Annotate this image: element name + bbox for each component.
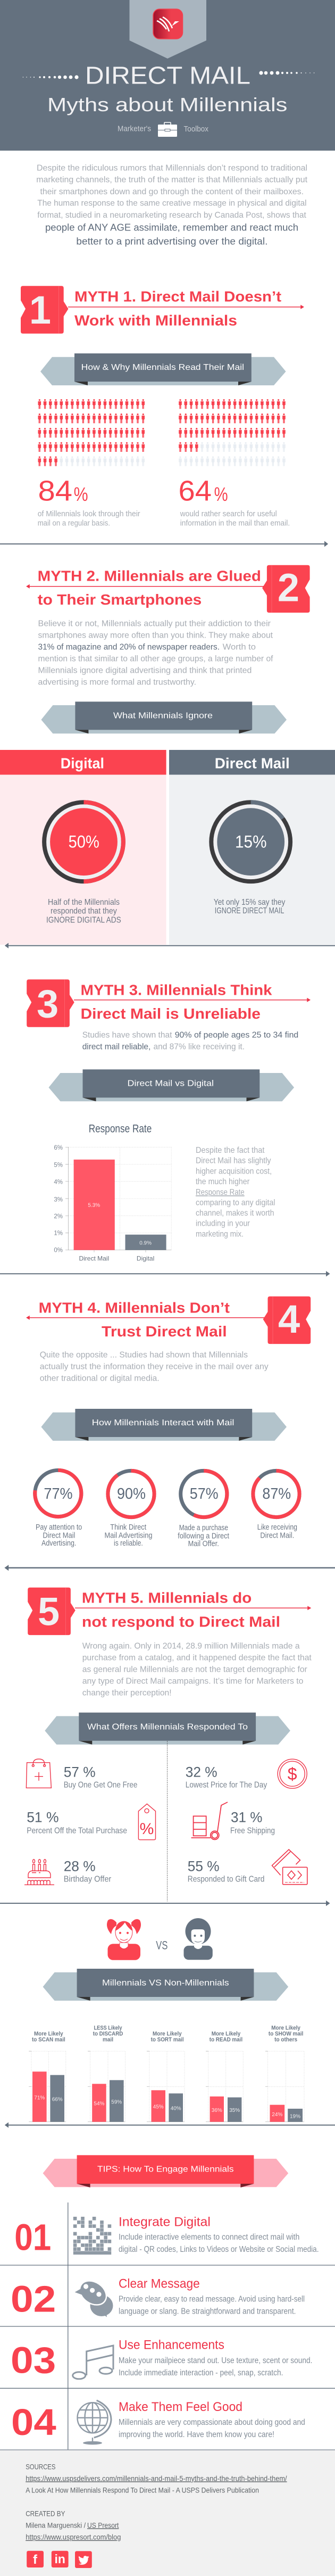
icon: facebook: [27, 2551, 44, 2567]
icon: music notes: [73, 2346, 113, 2379]
chart title: [269, 2025, 303, 2043]
icon: globe: [78, 2400, 111, 2445]
chart title: [93, 2025, 123, 2043]
ribbon: tips: [43, 2155, 288, 2187]
myth 1 heading: [21, 286, 303, 334]
panel: direct mail: [169, 750, 335, 945]
ribbon: what offers: [45, 1713, 290, 1745]
icon: shopping bag: [26, 1759, 51, 1788]
bar: direct mail: [74, 1160, 115, 1250]
ribbon: what millennials ignore: What Millennials Ignore: [113, 711, 213, 720]
intro text: format, studied in a neuromarketing research by Canada Post, shows that: [37, 211, 306, 220]
chart title: More Likely: [212, 2031, 241, 2037]
digital caption: Half of the Millennials: [48, 898, 120, 907]
tip 1: integrate digital: [14, 2215, 319, 2258]
direct mail caption: Yet only 15% say they: [214, 898, 285, 907]
myth 2 body: mention is that similar to all other age groups, a large number of: [38, 655, 273, 664]
offer: lowest price: 32 %: [186, 1764, 217, 1780]
intro text: better to a print advertising over the digital.: [76, 236, 267, 246]
chart title: to READ mail: [210, 2037, 242, 2043]
ribbon: what millennials ignore: [41, 701, 287, 733]
ribbon: how millennials interact: How Millennials Interact with Mail: [92, 1418, 234, 1427]
stat: 64 percent: [179, 475, 290, 527]
bars: [210, 2096, 224, 2122]
offer: buy one get one free: Buy One Get One Free: [64, 1781, 137, 1790]
chart: read mail: 35%: [229, 2108, 240, 2113]
sources: SOURCES: [26, 2462, 55, 2471]
myth 2 body: [38, 620, 273, 687]
direct mail caption: [214, 898, 285, 915]
donut: 50 percent: [44, 802, 123, 881]
chart: scan mail: 71%: [34, 2095, 45, 2101]
chart title: to SORT mail: [151, 2037, 184, 2043]
icon: cake: [24, 1860, 54, 1885]
bar value labels: 0.9%: [139, 1241, 152, 1246]
pictogram: 64 percent: [179, 399, 286, 466]
caption: Mail Offer.: [188, 1539, 219, 1548]
bars: [270, 2105, 284, 2122]
myth 2 heading: [27, 565, 310, 613]
icon: gift cards: [272, 1850, 307, 1885]
y axis labels: 6%: [54, 1145, 63, 1151]
chart title: LESS Likely: [94, 2025, 122, 2032]
stat: 84 percent: 84: [38, 475, 72, 507]
stat: 64 percent: 64: [179, 475, 212, 507]
chart commentary: channel, makes it worth: [196, 1209, 274, 1218]
toolbox label: Toolbox: [184, 125, 208, 134]
myth 5 body: purchase from a catalog, and it happened despite the fact that: [82, 1653, 312, 1662]
offer: birthday: Birthday Offer: [64, 1875, 112, 1884]
myth 2 body: Believe it or not, Millennials actually put their addiction to their: [38, 620, 271, 629]
badge 3: 3: [37, 982, 58, 1026]
vs label: VS: [156, 1939, 168, 1952]
myth 1 title line 2: Work with Millennials: [74, 312, 237, 328]
bars: [151, 2090, 165, 2122]
x axis labels: Direct Mail: [79, 1255, 109, 1262]
decorative dots right: [259, 71, 314, 75]
stat: 84 percent: of Millennials look through their: [38, 509, 140, 518]
myth 2 title line 1: MYTH 2. Millennials are Glued: [38, 568, 261, 584]
logo: [153, 9, 183, 39]
caption: Made a purchase: [179, 1523, 228, 1532]
caption: Advertising.: [41, 1539, 76, 1548]
tip 3: use enhancements: 03: [11, 2339, 56, 2381]
tip 4: make them feel good: Millennials are very compassionate about doing good and: [119, 2418, 305, 2427]
chart commentary: Response Rate: [196, 1188, 245, 1197]
donut: 15 percent: [211, 802, 290, 881]
tip 2: clear message: Provide clear, easy to read message. Avoid using hard-sell: [119, 2294, 305, 2303]
donut: 77 percent: 77%: [44, 1485, 73, 1502]
caption: Direct Mail: [43, 1531, 75, 1540]
myth 4 heading: [27, 1297, 311, 1344]
sources: A Look At How Millennials Respond To Direct Mail - A USPS Delivers Publication: [26, 2486, 259, 2494]
bar value labels: 5.3%: [88, 1203, 100, 1209]
donut: 87 percent: [253, 1471, 299, 1540]
arrow: [75, 1607, 311, 1609]
x axis labels: [79, 1255, 154, 1262]
chart commentary: comparing to any digital: [196, 1198, 275, 1207]
myth 2 body: 31% of magazine and 20% of newspaper readers.: [38, 643, 220, 652]
tip 2: clear message: 02: [11, 2278, 56, 2319]
digital caption: IGNORE DIGITAL ADS: [46, 915, 121, 924]
caption: Like receiving: [257, 1523, 297, 1532]
myth 2 body: Worth to: [223, 643, 256, 652]
badge 1: 1: [29, 288, 51, 332]
arrow: section divider: [5, 2124, 335, 2127]
icon: dollar coin: [278, 1759, 307, 1788]
chart title: to others: [274, 2037, 297, 2043]
ribbon: millennials vs non-millennials: [43, 1969, 288, 2001]
chart commentary: the much higher: [196, 1177, 250, 1186]
stat: 84 percent: mail on a regular basis.: [38, 518, 110, 527]
ribbon: direct mail vs digital: [49, 1069, 294, 1101]
badge 2: 2: [278, 565, 299, 609]
bar: digital: [125, 1235, 166, 1250]
credits: [26, 2509, 121, 2541]
illustration: millennial girl: [107, 1919, 141, 1960]
marketer's label: Marketer's: [118, 125, 151, 134]
donut: 50 percent: 50%: [69, 832, 99, 852]
intro text: The human response to the same creative message in physical and digital: [37, 199, 307, 208]
myth 5 body: as general rule Millennials are not the target demographic for: [82, 1665, 307, 1674]
chart commentary: Direct Mail has slightly: [196, 1157, 271, 1166]
chart: show mail: [265, 2025, 304, 2122]
offer: free shipping: 31 %: [231, 1809, 262, 1825]
myth 4 body: actually trust the information they receive in the mail over any: [40, 1363, 269, 1372]
myth 5 title line 1: MYTH 5. Millennials do: [82, 1590, 252, 1606]
tip 4: make them feel good: 04: [11, 2401, 56, 2443]
caption: Think Direct: [110, 1523, 147, 1532]
offer: birthday: 28 %: [64, 1859, 96, 1875]
caption: [36, 1523, 82, 1548]
x axis labels: Digital: [137, 1255, 154, 1262]
badge 2: [262, 565, 310, 613]
caption: [178, 1523, 230, 1548]
offer: gift card: Responded to Gift Card: [188, 1875, 264, 1884]
tip 3: use enhancements: Make your mailpiece stand out. Use texture, scent or sound.: [119, 2356, 312, 2365]
myth 4 title line 2: Trust Direct Mail: [102, 1323, 227, 1340]
chart: sort mail: 40%: [171, 2106, 181, 2112]
stat: 64 percent: would rather search for useful: [180, 509, 277, 518]
donut: 15 percent: 15%: [235, 832, 267, 852]
myth 3 body: direct mail reliable,: [82, 1042, 150, 1051]
icon: qr code: [73, 2217, 111, 2255]
credits: https://www.uspresort.com/blog: [26, 2533, 121, 2541]
intro text: people of ANY AGE assimilate, remember and react much: [45, 222, 298, 233]
chart: scan mail: [29, 2031, 66, 2122]
arrow: [68, 306, 303, 308]
intro text: their smartphones down and go through the content of their mailboxes.: [40, 187, 304, 196]
myth 4 body: [40, 1351, 269, 1383]
chart title: [151, 2031, 184, 2043]
myth 2 body: smartphones away more often than you think. They make about: [38, 631, 273, 640]
offer: birthday: [24, 1859, 112, 1885]
icon: twitter: [75, 2551, 92, 2568]
decorative dots left: [23, 75, 79, 79]
badge 4: 4: [278, 1297, 300, 1341]
caption: Direct Mail.: [260, 1531, 294, 1540]
tip 4: make them feel good: Make Them Feel Good: [119, 2400, 242, 2414]
myth 3 body: 90% of people ages 25 to 34 find: [175, 1030, 298, 1039]
bar chart: response rate: [54, 1123, 171, 1262]
icon: linkedin: [52, 2551, 69, 2567]
direct mail caption: IGNORE DIRECT MAIL: [215, 906, 284, 915]
chart title: More Likely: [34, 2031, 63, 2037]
tip 3: use enhancements: Use Enhancements: [119, 2338, 224, 2352]
offer: percent off: 51 %: [27, 1809, 58, 1825]
digital caption: responded that they: [51, 907, 117, 916]
icon: price tag: %: [140, 1820, 154, 1838]
myth 3 title line 2: Direct Mail is Unreliable: [81, 1005, 261, 1022]
icon: price tag: [138, 1804, 155, 1840]
ribbon: how millennials interact: [41, 1409, 287, 1441]
digital caption: [46, 898, 121, 924]
y axis labels: 5%: [54, 1162, 63, 1168]
chart title: More Likely: [271, 2025, 301, 2032]
header banner: [0, 0, 335, 151]
chart: show mail: 19%: [290, 2113, 300, 2119]
bars: [92, 2084, 106, 2122]
tip 2: clear message: [11, 2276, 305, 2319]
y axis labels: 2%: [54, 1213, 63, 1220]
myth 1 title line 1: MYTH 1. Direct Mail Doesn’t: [74, 288, 281, 305]
offer: lowest price: [186, 1759, 307, 1790]
myth 5 title line 2: not respond to Direct Mail: [82, 1613, 280, 1630]
y axis labels: 0%: [54, 1248, 63, 1254]
myth 3 title line 1: MYTH 3. Millennials Think: [81, 981, 272, 998]
myth 5 heading: [28, 1588, 311, 1635]
ribbon: how and why: [40, 353, 286, 385]
ribbon: tips: TIPS: How To Engage Millennials: [97, 2165, 234, 2174]
chart title: to SCAN mail: [32, 2037, 65, 2043]
stat: 84 percent: [38, 475, 140, 527]
chart title: [210, 2031, 242, 2043]
tip 2: clear message: language or slang. Be straightforward and transparent.: [119, 2307, 296, 2316]
title: direct mail: DIRECT MAIL: [85, 62, 250, 89]
icon: hand truck: [191, 1802, 228, 1839]
donut: 77 percent: [35, 1470, 82, 1548]
y axis labels: [54, 1145, 63, 1254]
credits: Milena Marguenski /: [26, 2521, 86, 2529]
chart commentary: marketing mix.: [196, 1230, 244, 1239]
icon: facebook: f: [33, 2553, 38, 2567]
offer: gift card: [188, 1850, 307, 1885]
offer: free shipping: [191, 1802, 275, 1839]
arrow: [74, 998, 310, 1001]
myth 4 title line 1: MYTH 4. Millennials Don’t: [39, 1300, 230, 1316]
icon: dollar coin: $: [288, 1764, 297, 1784]
intro text: [36, 164, 308, 246]
stat: 84 percent: %: [74, 483, 88, 505]
chart commentary: Despite the fact that: [196, 1146, 265, 1155]
tip 3: use enhancements: Include immediate interaction - peel, snap, scratch.: [119, 2368, 283, 2377]
donut: 57 percent: [178, 1471, 230, 1548]
chart: scan mail: 66%: [52, 2096, 63, 2102]
offer: gift card: 55 %: [188, 1859, 220, 1875]
badge 3: [27, 979, 74, 1027]
myth 2 body: advertising is more formal and trustworthy.: [38, 678, 196, 687]
arrow: [27, 1316, 264, 1319]
arrow: section divider: [5, 944, 335, 947]
ribbon: what offers: What Offers Millennials Responded To: [87, 1722, 248, 1731]
donut: 90 percent: 90%: [117, 1485, 146, 1502]
chart commentary: [196, 1146, 275, 1239]
pictogram: 84 percent: [38, 399, 145, 466]
bar value labels: [88, 1203, 152, 1246]
chart: sort mail: 45%: [153, 2104, 164, 2110]
arrow: section divider: [0, 542, 328, 546]
icon: chat bubbles: [75, 2276, 113, 2317]
myth 5 body: change their perception!: [82, 1688, 172, 1697]
intro text: Despite the ridiculous rumors that Millennials don’t respond to traditional: [37, 164, 307, 173]
logo pennant: [130, 0, 206, 59]
badge 1: [21, 286, 68, 334]
donut: 57 percent: 57%: [190, 1485, 219, 1502]
chart: discard mail: 54%: [94, 2101, 105, 2107]
arrow: section divider: [5, 1566, 335, 1570]
caption: is reliable.: [114, 1539, 143, 1548]
chart: sort mail: [147, 2031, 185, 2122]
myth 3 heading: [27, 979, 310, 1027]
intro text: marketing channels, the truth of the matter is that Millennials actually put: [36, 176, 308, 185]
stat: 64 percent: information in the mail than email.: [180, 518, 290, 527]
arrow: [27, 585, 264, 588]
credits: US Presort: [87, 2521, 119, 2529]
myth 5 body: Wrong again. Only in 2014, 28.9 million Millennials made a: [82, 1641, 300, 1650]
chart title: Response Rate: [89, 1123, 152, 1135]
y axis labels: 1%: [54, 1231, 63, 1237]
chart: read mail: 36%: [212, 2108, 222, 2113]
myth 3 body: [82, 1030, 298, 1051]
arrow: section divider: [0, 1272, 329, 1276]
subtitle: Myths about Millennials: [47, 94, 287, 115]
stat: 64 percent: %: [214, 483, 228, 505]
icon: linkedin: in: [54, 2552, 65, 2566]
myth 2 body: Millennials ignore digital advertising and think that printed: [38, 666, 252, 675]
badge 5: [28, 1588, 76, 1635]
digital heading: Digital: [61, 755, 104, 771]
myth 2 title line 2: to Their Smartphones: [38, 591, 202, 608]
caption: Mail Advertising: [104, 1531, 152, 1540]
donut: 90 percent: [104, 1471, 154, 1548]
footer panel: [0, 2450, 335, 2576]
myth 3 body: Studies have shown that: [82, 1030, 172, 1039]
chart: discard mail: 59%: [111, 2099, 122, 2105]
chart: read mail: [206, 2031, 243, 2122]
chart: discard mail: [88, 2025, 125, 2122]
chart commentary: higher acquisition cost,: [196, 1167, 272, 1176]
tip 3: use enhancements: [11, 2338, 312, 2381]
tip 2: clear message: Clear Message: [119, 2276, 200, 2291]
illustration: non-millennial: [184, 1918, 213, 1960]
myth 5 body: any type of Direct Mail campaigns. It’s time for Marketers to: [82, 1677, 304, 1686]
bars: [32, 2071, 47, 2122]
panel: digital: [0, 750, 166, 945]
chart title: to DISCARD: [93, 2031, 123, 2037]
offer: buy one get one free: [26, 1759, 137, 1790]
direct mail heading: Direct Mail: [215, 755, 290, 771]
ribbon: how and why: How & Why Millennials Read Their Mail: [81, 363, 244, 372]
tip 1: integrate digital: Include interactive elements to connect direct mail with: [119, 2233, 299, 2242]
caption: [257, 1523, 297, 1540]
myth 3 body: and 87% like receiving it.: [153, 1042, 245, 1051]
offer: free shipping: Free Shipping: [230, 1826, 275, 1835]
y axis labels: 3%: [54, 1196, 63, 1203]
caption: following a Direct: [178, 1531, 230, 1540]
tip 1: integrate digital: Integrate Digital: [119, 2215, 211, 2229]
offer: buy one get one free: 57 %: [64, 1764, 96, 1780]
chart: show mail: 24%: [272, 2112, 282, 2118]
tip 4: make them feel good: [11, 2400, 305, 2445]
offer: percent off: Percent Off the Total Purchase: [27, 1826, 127, 1835]
tip 4: make them feel good: improving the world. Have them know you care!: [119, 2430, 274, 2439]
myth 5 body: [82, 1641, 312, 1697]
ribbon: millennials vs non-millennials: Millennials VS Non-Millennials: [102, 1979, 229, 1988]
caption: [104, 1523, 152, 1548]
y axis labels: 4%: [54, 1179, 63, 1185]
chart commentary: including in your: [196, 1219, 250, 1228]
offer: lowest price: Lowest Price for The Day: [186, 1781, 267, 1790]
sources: https://www.uspsdelivers.com/millennials-and-mail-5-myths-and-the-truth-behind-them/: [26, 2474, 287, 2482]
chart title: mail: [103, 2037, 113, 2043]
chart title: More Likely: [153, 2031, 182, 2037]
ribbon: direct mail vs digital: Direct Mail vs Digital: [128, 1079, 214, 1088]
arrow: section divider: [0, 1902, 329, 1905]
chart title: [32, 2031, 65, 2043]
caption: Pay attention to: [36, 1523, 82, 1532]
icon: briefcase: [158, 122, 177, 137]
myth 4 body: Quite the opposite ... Studies had shown that Millennials: [40, 1351, 248, 1360]
sources: [26, 2462, 287, 2494]
myth 4 body: other traditional or digital media.: [40, 1374, 160, 1383]
donut: 87 percent: 87%: [262, 1485, 291, 1502]
offer: percent off: [27, 1804, 156, 1840]
badge 5: 5: [38, 1589, 60, 1633]
badge 4: [263, 1297, 311, 1344]
tip 1: integrate digital: 01: [14, 2216, 51, 2258]
credits: CREATED BY: [26, 2509, 65, 2517]
chart title: to SHOW mail: [269, 2031, 303, 2037]
